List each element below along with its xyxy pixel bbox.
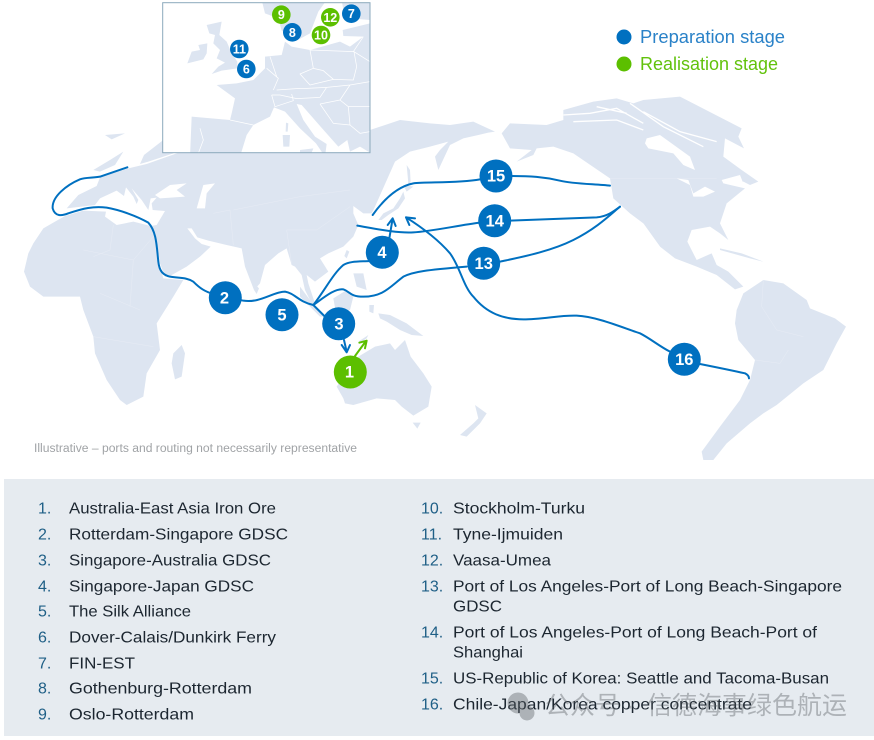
land: Ireland [187,43,207,63]
land: Timor [358,335,368,343]
list column 1: Rotterdam-Singapore GDSC [69,526,288,544]
list column 1: Singapore-Japan GDSC [69,578,254,596]
marker 4: 4 [377,244,387,262]
list column 1: 5. [38,604,51,620]
land: Sakhalin [407,165,411,183]
land: Sulawesi [369,305,374,313]
marker 4 [366,236,399,269]
land: Iceland [105,133,125,139]
water bodies and faint borders [83,103,803,363]
route 1 arrow [355,341,367,356]
land: Tasmania [413,423,421,429]
list column 1: Singapore-Australia GDSC [69,552,271,570]
map disclaimer note: Illustrative – ports and routing not necessarily representative [34,443,357,455]
watermark text: 信德海事绿色航运 [647,692,847,720]
list column 1: 9. [38,706,51,724]
land: Cuba [720,248,763,262]
route 4: Singapore-Japan [313,261,370,305]
marker 11 [230,40,249,58]
legend: preparation stage: Preparation stage [640,27,785,47]
land: Eurasia [67,117,495,303]
route lines [53,167,749,378]
land: Corsica and Sardinia [283,123,290,147]
marker 7 [342,4,361,23]
list column 1: 1. [38,500,51,518]
list column 2: 16. [421,696,443,714]
marker 3 [322,307,355,340]
list column 2: Tyne-Ijmuiden [453,526,563,544]
land: Sri Lanka [254,284,259,294]
route 15: Seattle-Busan [373,176,610,215]
land: Borneo [333,290,353,317]
list column 1: 8. [38,680,51,698]
list column 2: Chile-Japan/Korea copper concentrate [453,696,752,714]
marker 11: 11 [233,42,246,56]
marker 7: 7 [348,7,355,21]
land: New Guinea [378,313,423,336]
list column 2: Stockholm-Turku [453,500,585,518]
marker 5: 5 [277,306,287,324]
list column 1: 4. [38,578,51,596]
world map land [24,97,846,460]
land: Finland [342,3,370,20]
marker 15: 15 [487,168,505,186]
list column 2: 14. [421,624,443,642]
land: Britain [93,152,123,172]
legend: realisation stage: Realisation stage [640,54,778,74]
list column 1: Australia-East Asia Iron Ore [69,500,276,518]
panel: corridor list [4,479,874,736]
marker 12 [321,8,340,27]
land: Great Britain [207,22,237,74]
list column 2: US-Republic of Korea: Seattle and Tacoma-Busan [453,670,829,688]
panel: Europe inset map [163,0,377,157]
marker 9 [272,5,291,24]
land: Japan Hokkaido [403,185,413,192]
list column 1 [38,500,288,724]
marker 10 [312,26,330,44]
land: continental Europe [190,23,377,157]
land: Scandinavia fragment [140,140,173,164]
marker 14: 14 [486,212,505,230]
inset borders [198,37,370,153]
list column 2: 13. [421,578,443,596]
marker 13 [467,247,500,280]
list column 1: The Silk Alliance [69,604,191,620]
marker 12: 12 [323,11,337,25]
land: Philippines [353,273,367,290]
land: Madagascar [172,345,185,379]
list column 2: Shanghai [453,644,523,662]
land: Scandinavia [262,3,324,40]
route 16: Chile-Japan [406,217,749,378]
route 14: Los Angeles-Shanghai [357,207,620,232]
marker 16 [668,343,701,376]
list column 2: GDSC [453,598,502,616]
legend [616,27,785,74]
list column 2: 10. [421,500,443,518]
list column 1: 3. [38,552,51,570]
route 4 arrow [388,218,396,238]
watermark text: 公众号 [545,692,620,720]
route 13: Los Angeles-Singapore [313,207,620,305]
land: Sicily [300,148,314,152]
list column 2: 12. [421,552,443,570]
marker 6 [237,60,256,78]
marker 5 [266,298,298,331]
marker 3: 3 [334,316,344,334]
marker 15 [480,160,512,192]
list column 2: Port of Los Angeles-Port of Long Beach-Singapore [453,578,842,596]
marker 2: 2 [220,290,229,308]
list column 2: 11. [421,526,442,544]
marker 8 [283,23,302,42]
route 3 arrow [342,340,350,352]
list column 1: FIN-EST [69,656,135,672]
watermark text: · [626,692,634,720]
land: Japan Honshu [378,192,405,220]
marker 14 [478,204,511,237]
list column 1: 6. [38,630,51,646]
land: North America and Arctic [502,97,758,289]
marker 2 [209,281,242,314]
list column 1: Dover-Calais/Dunkirk Ferry [69,630,276,646]
land: Australia [337,340,432,416]
list column 1: Oslo-Rotterdam [69,706,194,724]
land: Taiwan [344,250,349,258]
land: South America [702,280,846,460]
list column 1: Gothenburg-Rotterdam [69,680,252,698]
map markers [209,160,701,388]
marker 6: 6 [243,62,250,76]
marker 8: 8 [289,26,296,40]
marker 1: 1 [345,364,354,382]
list column 1: 7. [38,656,51,672]
route 2: Rotterdam-Singapore [53,167,313,305]
marker 10: 10 [314,28,328,42]
list column 2: Vaasa-Umea [453,552,551,570]
land: Sumatra and Java [300,287,325,317]
marker 13: 13 [475,255,493,273]
marker 16: 16 [675,351,693,369]
marker 9: 9 [278,8,285,22]
watermark [508,692,847,720]
list column 1: 2. [38,526,51,544]
marker 1 [334,356,367,388]
list column 2: Port of Los Angeles-Port of Long Beach-Port of [453,624,818,642]
list column 2 [421,500,842,714]
list column 2: 15. [421,670,443,688]
icon: chat bubbles [508,692,534,720]
land: Africa [24,211,183,405]
route 3: Singapore-Australia [313,305,328,320]
land: New Zealand [460,405,487,437]
